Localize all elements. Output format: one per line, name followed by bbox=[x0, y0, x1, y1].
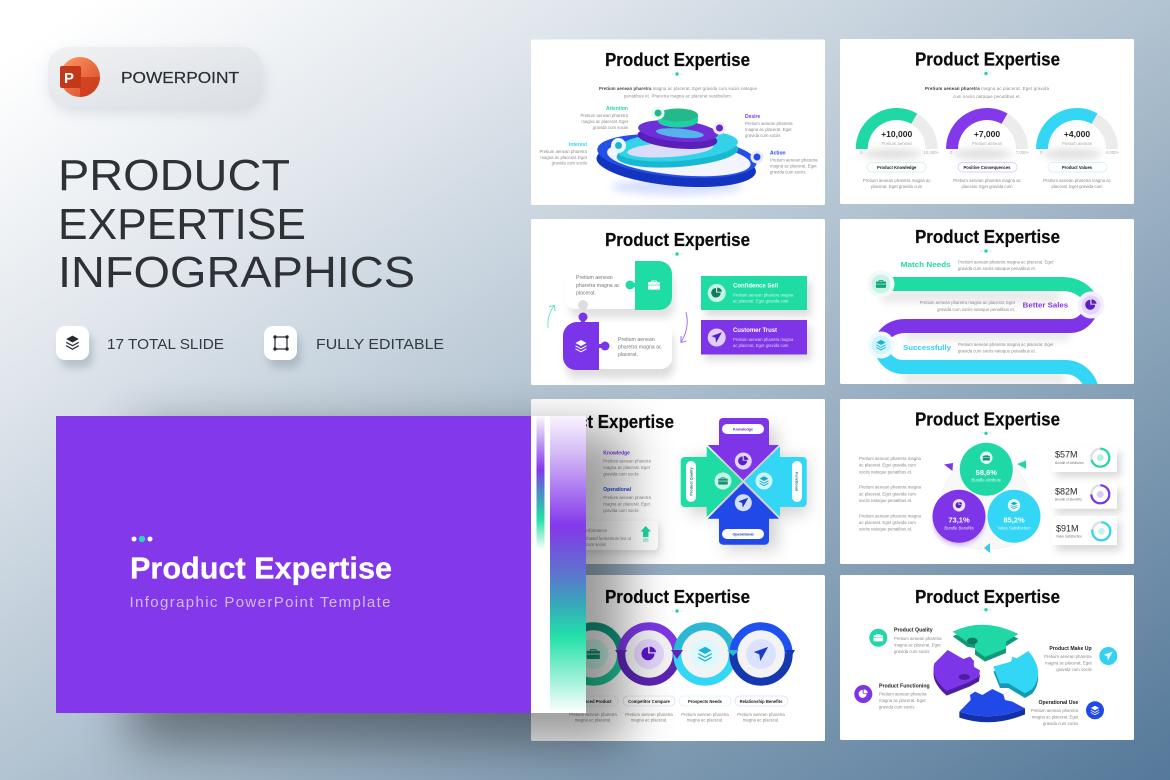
puzzle pieces bbox=[933, 625, 1038, 722]
circle: bundle attribute: 58,6% bbox=[976, 468, 997, 477]
label: product quality: magna ac placerat. Eget bbox=[894, 642, 941, 648]
stat: $91M bbox=[1052, 516, 1121, 551]
left text: ac placerat. Eget gravida cum bbox=[859, 491, 916, 496]
left text: Pretium aenean pharetra magna bbox=[859, 485, 921, 490]
text: match needs: Match Needs bbox=[901, 260, 951, 269]
text: match needs: Pretium aenean pharetra magna ac placerat. Eget bbox=[958, 260, 1054, 264]
cover subtitle: Infographic PowerPoint Template bbox=[130, 594, 390, 611]
card: performance: gravida cum sociis bbox=[571, 542, 606, 547]
stat: $57M bbox=[1052, 447, 1121, 477]
circle: value satisfaction bbox=[988, 490, 1040, 543]
stat: $82M: Bundle of Benefits bbox=[1055, 498, 1082, 502]
pills: Prospects Needs bbox=[688, 699, 723, 704]
left text: sociis natoque penatibus et. bbox=[859, 498, 912, 503]
gauge: consequences: Positive Consequences bbox=[963, 165, 1011, 170]
label: interest: Interest bbox=[569, 142, 587, 148]
feature: 17 total slide bbox=[56, 326, 224, 368]
arrow: knowledge: Knowledge bbox=[733, 428, 753, 432]
gauge: values: Product Values bbox=[1062, 165, 1093, 170]
gauge: consequences: 7,000+ bbox=[1016, 150, 1029, 155]
label: action: Pretium aenean pharetra bbox=[770, 158, 818, 162]
gauge: values: +4,000 bbox=[1064, 129, 1090, 139]
captions: magna ac placerat. bbox=[631, 718, 667, 722]
label: product quality: Product Quality bbox=[894, 628, 933, 634]
slide 2: gauges: Pretium aenean pharetra magna ac placerat. Eget gravida bbox=[925, 86, 1050, 91]
cover dots bbox=[132, 536, 152, 542]
circle: value satisfaction: Value Satisfaction bbox=[997, 526, 1031, 530]
circle: bundle benefits bbox=[932, 490, 986, 546]
label: operational use bbox=[1031, 700, 1104, 726]
pills bbox=[568, 696, 788, 706]
marker: successfully bbox=[868, 332, 894, 358]
puzzle: green: placerat. bbox=[576, 290, 596, 296]
label: desire: gravida cum sociis bbox=[745, 133, 780, 138]
gauge: knowledge: 10,000+ bbox=[923, 150, 939, 155]
label: product make up: gravida cum sociis bbox=[1056, 667, 1092, 672]
label: product make up: Pretium aenean pharetra bbox=[1044, 654, 1092, 659]
text: operational: magna ac placerat. Eget bbox=[603, 502, 651, 506]
circle: bundle benefits: Bundle Benefits bbox=[944, 526, 974, 530]
captions: magna ac placerat. bbox=[575, 718, 611, 722]
label: product quality bbox=[869, 628, 942, 654]
label: product make up: magna ac placerat. Eget bbox=[1045, 660, 1093, 666]
main title: INFOGRAPHICS bbox=[58, 249, 415, 297]
badge: PowerPoint: P bbox=[64, 70, 74, 87]
label: action: Action bbox=[770, 150, 786, 156]
text: better sales: Pretium aenean pharetra magna ac placerat. Eget bbox=[920, 300, 1016, 305]
text: better sales: Better Sales bbox=[1023, 301, 1068, 310]
text: operational: gravida cum sociis bbox=[603, 508, 639, 513]
slide 1: layered rings: Pretium aenean pharetra magna ac placerat. Eget gravida cum sociis natoque bbox=[599, 86, 758, 91]
gauge: knowledge: 0 bbox=[860, 150, 863, 155]
captions: magna ac placerat. bbox=[743, 718, 779, 722]
label: product functioning bbox=[854, 684, 930, 710]
pills: Competitor Compare bbox=[628, 699, 670, 704]
gauge: consequences: placerat. Eget gravida cum bbox=[961, 184, 1013, 189]
slide 2: gauges: cum sociis natoque penatibus et. bbox=[953, 94, 1021, 99]
gauge: values: 4,000+ bbox=[1106, 150, 1119, 155]
text: successfully: Successfully bbox=[903, 343, 952, 352]
captions: Pretium aenean pharetra bbox=[569, 712, 617, 717]
card: confidence sell: Confidence Sell bbox=[733, 284, 778, 290]
label: operational use: magna ac placerat. Eget bbox=[1032, 714, 1079, 720]
markers bbox=[611, 106, 764, 164]
gauge: knowledge bbox=[860, 114, 939, 189]
slide 5: arrow cross bbox=[529, 399, 825, 564]
main title: PRODUCT bbox=[58, 152, 290, 200]
marker: match needs bbox=[868, 270, 894, 298]
step: relationship benefits bbox=[733, 626, 789, 682]
label: attention: gravida cum sociis bbox=[593, 125, 628, 130]
pills: Relationship Benefits bbox=[740, 699, 783, 704]
gauge: values: Pretium aenean bbox=[1062, 141, 1093, 146]
step: advanced product bbox=[566, 626, 621, 682]
gradient strip bbox=[531, 416, 586, 713]
cover panel bbox=[56, 416, 532, 713]
slide 2: gauges: Product Expertise bbox=[915, 50, 1060, 70]
slide 6: venn circles bbox=[840, 399, 1134, 564]
label: interest bbox=[539, 142, 588, 166]
text: successfully bbox=[903, 342, 1054, 354]
gauge: knowledge: Product Knowledge bbox=[877, 165, 917, 170]
label: action: magna ac placerat. Eget bbox=[770, 164, 817, 168]
stat: $82M bbox=[1052, 484, 1121, 514]
left text: ac placerat. Eget gravida cum bbox=[859, 463, 916, 468]
gauge: consequences: 0 bbox=[950, 150, 953, 155]
label: product functioning: Pretium aenean pharetra bbox=[879, 692, 927, 696]
captions: Pretium aenean pharetra bbox=[681, 712, 729, 717]
text: operational: Operational bbox=[603, 487, 632, 493]
cover shadow bbox=[130, 430, 625, 745]
gauge: knowledge: Pretium aenean pharetra magna ac bbox=[863, 178, 931, 183]
text: knowledge: gravida cum sociis bbox=[603, 472, 639, 476]
left text bbox=[859, 456, 921, 532]
label: operational use: gravida cum sociis bbox=[1043, 721, 1078, 726]
puzzle: purple: placerat. bbox=[618, 352, 638, 358]
step: competitor compare bbox=[621, 626, 677, 682]
label: desire: Desire bbox=[745, 114, 761, 120]
card: customer trust: ac placerat. Eget gravida cum bbox=[733, 343, 789, 348]
left text: sociis natoque penatibus et. bbox=[859, 470, 912, 474]
gauge: consequences: Pretium aenean bbox=[972, 141, 1003, 146]
slide 7: circular process bbox=[531, 575, 825, 741]
puzzle: purple bbox=[563, 312, 674, 378]
puzzle: green bbox=[565, 261, 674, 318]
label: product quality: Pretium aenean pharetra bbox=[894, 636, 942, 641]
left text: Pretium aenean pharetra magna bbox=[859, 456, 921, 461]
card: customer trust: Pretium aenean pharetra magna bbox=[733, 337, 794, 342]
captions: magna ac placerat. bbox=[687, 718, 723, 722]
backdrop bbox=[936, 452, 1036, 549]
card: confidence sell: Pretium aenean pharetra magna bbox=[733, 292, 794, 298]
arrow: operational: Operational bbox=[732, 533, 754, 537]
main title bbox=[58, 152, 415, 297]
arrow: operational bbox=[708, 483, 779, 545]
stat: $91M: Value Satisfaction bbox=[1056, 535, 1082, 539]
step: prospects needs bbox=[677, 626, 733, 682]
text: knowledge: Pretium aenean pharetra bbox=[603, 458, 651, 464]
card: confidence sell: ac placerat. Eget gravida cum bbox=[733, 298, 789, 304]
cylinder: attention bbox=[658, 108, 698, 128]
card: performance: Pretium amet phasel fermentum leo ut bbox=[558, 536, 632, 541]
card: performance bbox=[540, 521, 660, 554]
pills: Advanced Product bbox=[574, 699, 612, 704]
ribbon bbox=[881, 284, 1092, 394]
gauge: values: Pretium aenean pharetra magna ac bbox=[1043, 178, 1112, 183]
gauge: knowledge: placerat. Eget gravida cum bbox=[871, 184, 923, 189]
ring: interest bbox=[615, 127, 739, 171]
card: customer trust bbox=[701, 320, 811, 360]
slide 2: gauges bbox=[840, 39, 1134, 204]
slide 1: layered rings: penatibus et. Pharetra magna ac placerat vestibulum. bbox=[624, 94, 732, 98]
captions bbox=[569, 712, 785, 722]
label: action: gravida cum sociis bbox=[770, 170, 805, 174]
badge: PowerPoint: POWERPOINT bbox=[121, 70, 240, 87]
label: product make up: Product Make Up bbox=[1049, 646, 1092, 652]
gauge: values bbox=[1040, 114, 1119, 189]
gauge: values: 0 bbox=[1040, 150, 1043, 155]
text: knowledge: Knowledge bbox=[603, 450, 630, 456]
piece: purple bbox=[933, 650, 980, 696]
label: attention: magna ac placerat. Eget bbox=[581, 119, 629, 124]
label: attention bbox=[580, 106, 629, 130]
gauge: values: placerat. Eget gravida cum bbox=[1051, 184, 1103, 189]
text: better sales bbox=[920, 300, 1068, 312]
text: operational bbox=[603, 487, 651, 513]
gauge: consequences: +7,000 bbox=[974, 129, 1000, 139]
label: operational use: Pretium aenean pharetra bbox=[1031, 708, 1079, 713]
junction arrows bbox=[615, 650, 795, 659]
card: performance: Performance bbox=[582, 528, 608, 533]
stat: $57M: $57M bbox=[1055, 450, 1078, 460]
text: successfully: Pretium aenean pharetra magna ac placerat. Eget bbox=[958, 342, 1054, 347]
circle: bundle benefits: 73,1% bbox=[948, 516, 970, 524]
captions: Pretium aenean pharetra bbox=[625, 712, 673, 717]
arrow: functional: Functional bbox=[794, 472, 798, 491]
slide 4: winding ribbon: Product Expertise bbox=[915, 227, 1060, 247]
cross shadow bbox=[689, 428, 807, 550]
stat: $82M: $82M bbox=[1055, 486, 1078, 496]
gauge: consequences: Pretium aenean pharetra magna ac bbox=[953, 178, 1022, 183]
slide 4: winding ribbon bbox=[840, 219, 1134, 394]
label: interest: magna ac placerat. Eget bbox=[540, 155, 588, 160]
card: confidence sell bbox=[701, 276, 811, 316]
arrow: knowledge bbox=[708, 418, 779, 480]
label: product functioning: gravida cum sociis bbox=[879, 704, 914, 710]
label: operational use: Operational Use bbox=[1039, 700, 1078, 706]
label: attention: Pretium aenean pharetra bbox=[580, 113, 629, 118]
main title: EXPERTISE bbox=[58, 201, 306, 249]
slide 1: layered rings bbox=[531, 40, 825, 205]
badge: PowerPoint bbox=[48, 47, 262, 111]
text: knowledge: magna ac placerat. Eget bbox=[603, 465, 651, 470]
label: desire: Pretium aenean pharetra bbox=[745, 121, 793, 126]
cover title: Product Expertise bbox=[130, 550, 392, 586]
label: product functioning: magna ac placerat. Eget bbox=[879, 698, 926, 703]
circle: bundle attribute: Bundle Attribute bbox=[972, 478, 1002, 482]
puzzle: green: Pretium aenean bbox=[576, 275, 613, 281]
label: product quality: gravida cum sociis bbox=[894, 649, 929, 654]
stat: $91M: $91M bbox=[1056, 523, 1079, 533]
label: action bbox=[770, 150, 818, 174]
left text: ac placerat. Eget gravida cum bbox=[859, 520, 916, 525]
ring: action bbox=[595, 128, 759, 193]
piece: green bbox=[953, 625, 1018, 662]
marker: better sales bbox=[1078, 292, 1104, 318]
captions: Pretium aenean pharetra bbox=[737, 712, 785, 717]
slide 1: layered rings: Product Expertise bbox=[605, 50, 750, 70]
left text: sociis natoque penatibus et. bbox=[859, 527, 912, 532]
text: knowledge bbox=[603, 450, 651, 476]
text: operational: Pretium aenean pharetra bbox=[603, 495, 651, 500]
slide 3: puzzle pair: Product Expertise bbox=[605, 230, 750, 250]
arrow: functional bbox=[745, 446, 807, 517]
gauge: knowledge: +10,000 bbox=[881, 129, 912, 139]
arrow: quality: Product Quality bbox=[689, 466, 693, 496]
label: product make up bbox=[1044, 646, 1117, 672]
circle: value satisfaction: 85,2% bbox=[1003, 516, 1025, 524]
label: desire: magna ac placerat. Eget bbox=[745, 127, 792, 132]
puzzle: purple: pharetra magna ac bbox=[618, 344, 662, 350]
feature: 17 total slide: 17 TOTAL SLIDE bbox=[107, 337, 224, 353]
label: interest: Pretium aenean pharetra bbox=[539, 149, 588, 154]
ring: desire bbox=[637, 117, 719, 152]
left text: Pretium aenean pharetra magna bbox=[859, 513, 921, 518]
slide 3: puzzle pair bbox=[531, 219, 825, 385]
slide 6: venn circles: Product Expertise bbox=[915, 410, 1060, 430]
slide 5: arrow cross: Product Expertise bbox=[529, 412, 674, 432]
puzzle: green: pharetra magna ac bbox=[576, 283, 620, 289]
piece: cyan bbox=[993, 651, 1038, 698]
slide 8: 3D puzzle: Product Expertise bbox=[915, 587, 1060, 607]
feature: fully editable: FULLY EDITABLE bbox=[316, 337, 444, 353]
piece: blue bbox=[959, 689, 1025, 722]
gauge: consequences bbox=[950, 114, 1029, 189]
arrow: teal bbox=[548, 306, 555, 328]
label: attention: Attention bbox=[606, 106, 628, 112]
text: better sales: gravida cum sociis natoque penatibus et. bbox=[937, 307, 1015, 312]
slide 7: circular process: Product Expertise bbox=[605, 587, 750, 607]
card: customer trust: Customer Trust bbox=[733, 328, 777, 334]
label: product functioning: Product Functioning bbox=[879, 684, 930, 690]
slide 8: 3D puzzle bbox=[840, 575, 1134, 740]
label: desire bbox=[745, 114, 793, 138]
label: interest: gravida cum sociis bbox=[552, 160, 587, 166]
puzzle: purple: Pretium aenean bbox=[618, 337, 655, 343]
text: match needs: gravida cum sociis natoque penatibus et. bbox=[958, 266, 1036, 271]
arrow: purple bbox=[681, 312, 687, 342]
stat: $57M: Bundle of Attributes bbox=[1055, 461, 1084, 465]
arrow: quality bbox=[681, 446, 742, 517]
text: match needs bbox=[901, 260, 1054, 271]
circle: bundle attribute bbox=[960, 443, 1013, 496]
gauge: knowledge: Pretium aenean bbox=[882, 141, 912, 146]
marker triangles bbox=[944, 460, 1026, 553]
feature: fully editable bbox=[264, 326, 444, 368]
text: successfully: gravida cum sociis natoque penatibus et. bbox=[958, 348, 1036, 354]
